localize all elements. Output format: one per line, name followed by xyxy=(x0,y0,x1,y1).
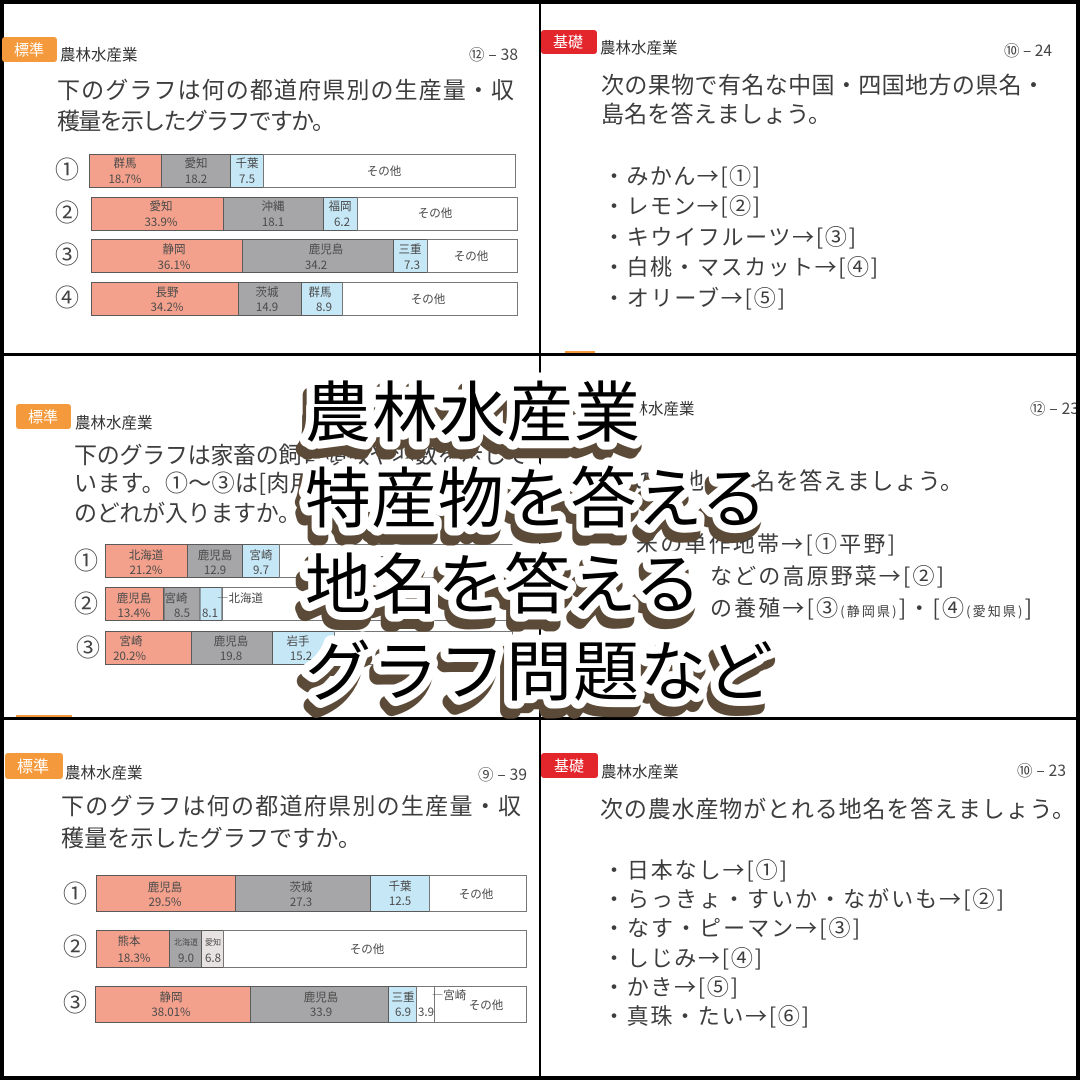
chart row 1: 21.2% xyxy=(130,562,163,578)
chart row 2: その他 xyxy=(350,941,385,957)
badge: standard level: 標準 xyxy=(28,406,58,427)
overlay title xyxy=(305,360,773,715)
chart row 2: 鹿児島 xyxy=(117,590,151,606)
badge: basic level xyxy=(541,753,598,778)
chart row 2: その他 xyxy=(418,205,453,221)
question text: 穫量を示したグラフですか。 xyxy=(61,819,361,853)
question text: 下のグラフは何の都道府県別の生産量・収 xyxy=(61,787,521,821)
chart row 1: ① xyxy=(63,874,87,909)
chart row 1: 千葉 xyxy=(388,878,412,894)
chart row 3: 34.2 xyxy=(305,257,327,273)
badge: basic level xyxy=(541,30,597,54)
chart row 3: ③ xyxy=(76,628,100,663)
badge: standard level: 標準 xyxy=(17,753,49,777)
chart row 1: 7.5 xyxy=(239,171,255,187)
question text: います。①〜③は[肉用牛・豚・採卵鶏] xyxy=(74,464,484,498)
chart row 1: 鹿児島 xyxy=(198,547,232,563)
question number: ⑩ – 24 xyxy=(1004,39,1052,61)
chart row 2: ② xyxy=(55,193,79,228)
chart row 3: 三重 xyxy=(398,241,422,257)
category label: 農林水産業 xyxy=(600,36,678,58)
chart row 3: —宮崎 xyxy=(432,987,467,1003)
question text: 穫量を示したグラフですか。 xyxy=(57,102,335,136)
chart row 2 xyxy=(63,927,526,968)
chart row 4: 14.9 xyxy=(256,299,278,315)
chart row 3: 鹿児島 xyxy=(304,989,338,1005)
question number: ⑩ – 23 xyxy=(1017,759,1066,781)
chart row 3 xyxy=(63,983,526,1022)
category label: 農林水産業 xyxy=(617,397,695,419)
chart row 3: 36.1% xyxy=(158,257,191,273)
chart row 2: 愛知 xyxy=(150,198,172,214)
answer list: ・キウイフルーツ→[③] xyxy=(603,220,856,252)
chart row 2: 6.2 xyxy=(334,214,350,230)
chart row 3: 15.2 xyxy=(290,648,312,664)
chart row 1: 12.9 xyxy=(204,562,226,578)
chart row 1: 茨城 xyxy=(290,879,313,895)
chart row 2 xyxy=(55,193,518,230)
chart row 1: 愛知 xyxy=(184,155,208,171)
chart row 3: 静岡 xyxy=(160,989,182,1005)
chart row 3: 33.9 xyxy=(310,1004,332,1020)
question text: 下のグラフは家畜の飼育頭数や羽数を示して xyxy=(74,436,528,470)
chart row 2: 9.0 xyxy=(178,950,194,966)
category label: 農林水産業 xyxy=(601,760,679,782)
answer list xyxy=(636,527,1032,623)
chart row 1: 千葉 xyxy=(236,155,259,171)
chart row 1 xyxy=(63,874,526,912)
chart row 3: 19.8 xyxy=(220,648,242,664)
question text: 次の果物で有名な中国・四国地方の県名・ xyxy=(601,66,1045,100)
panel: graph question 12-38 xyxy=(2,4,539,353)
answer list: ・みかん→[①] xyxy=(603,159,760,191)
chart row 1 xyxy=(74,541,512,578)
panel: livestock graph question xyxy=(4,356,539,717)
panel: regional production question 12-23 xyxy=(541,356,1079,717)
chart row 3: 6.9 xyxy=(395,1004,411,1020)
chart row 1: 29.5% xyxy=(149,894,182,910)
chart row 1: 鹿児島 xyxy=(148,879,182,895)
category label: 農林水産業 xyxy=(60,43,138,65)
chart row 2: 北海道 xyxy=(174,937,198,948)
chart row 2: ② xyxy=(74,584,98,619)
chart row 3: 鹿児島 xyxy=(214,633,248,649)
answer list: の養殖→[③(静岡県)]・[④(愛知県)] xyxy=(710,591,1032,623)
chart row 2: 愛知 xyxy=(205,937,221,948)
chart row 3 xyxy=(76,628,512,664)
question number: ⑫ – 38 xyxy=(469,43,518,65)
overlay title: グラフ問題など xyxy=(305,619,773,715)
chart row 3: 鹿児島 xyxy=(309,241,343,257)
chart row 2: 33.9% xyxy=(145,214,178,230)
chart row 1: 27.3 xyxy=(290,894,312,910)
category label: 農林水産業 xyxy=(65,761,143,783)
chart row 4: 茨城 xyxy=(256,284,279,300)
chart row 2: 沖縄 xyxy=(262,198,285,214)
chart row 3: その他 xyxy=(469,997,504,1013)
badge: standard level xyxy=(5,753,63,779)
question text: 島名を答えましょう。 xyxy=(601,95,831,129)
answer list: ・日本なし→[①] xyxy=(603,853,787,885)
chart row 4: 群馬 xyxy=(308,284,332,300)
answer list: 米の単作地帯→[①平野] xyxy=(636,527,895,559)
chart row 3: ③ xyxy=(55,235,79,270)
chart row 1: 18.2 xyxy=(185,171,207,187)
chart row 2: 熊本 xyxy=(118,933,141,949)
chart row 1: ① xyxy=(55,150,79,185)
answer list: ・白桃・マスカット→[④] xyxy=(603,250,878,282)
question text xyxy=(57,71,514,136)
chart row 1: 12.5 xyxy=(389,893,411,909)
answer list: ・らっきょ・すいか・ながいも→[②] xyxy=(603,882,1004,914)
answer list: などの高原野菜→[②] xyxy=(710,559,944,591)
answer list: ・しじみ→[④] xyxy=(603,941,762,973)
category label: 農林水産業 xyxy=(75,411,153,433)
panel: production place question 10-23 xyxy=(541,720,1076,1076)
answer list: ・真珠・たい→[⑥] xyxy=(603,999,809,1031)
chart row 3: 静岡 xyxy=(162,241,186,257)
chart row 3: 3.9 xyxy=(418,1004,434,1020)
chart row 4: 34.2% xyxy=(151,299,184,315)
answer list xyxy=(603,159,878,313)
question text: 次の産地の地名を答えましょう。 xyxy=(610,462,963,496)
chart row 3: 38.01% xyxy=(151,1004,191,1020)
chart row 1: 18.7% xyxy=(109,171,142,187)
answer list: ・なす・ピーマン→[③] xyxy=(603,911,860,943)
chart row 3: その他 xyxy=(454,248,489,264)
answer list: ・レモン→[②] xyxy=(603,189,760,221)
chart row 4: その他 xyxy=(411,291,446,307)
chart row 2: 18.1 xyxy=(262,214,284,230)
chart row 2: 福岡 xyxy=(328,198,352,214)
chart row 3: 7.3 xyxy=(404,257,420,273)
question number: ⑨ – 39 xyxy=(478,763,527,785)
question text: のどれが入りますか。 xyxy=(74,494,301,528)
badge: basic level: 基礎 xyxy=(554,755,584,776)
question number: ⑫ – 23 xyxy=(1030,397,1079,419)
chart row 2: その他 xyxy=(363,597,398,613)
chart row 2: 13.4% xyxy=(118,605,151,621)
chart row 1: 群馬 xyxy=(114,155,136,171)
chart row 3 xyxy=(55,235,518,273)
chart row 2 xyxy=(74,584,512,621)
chart row 1: 宮崎 xyxy=(250,547,273,563)
next badge peek xyxy=(16,715,72,717)
question text: 下のグラフは何の都道府県別の生産量・収 xyxy=(57,71,514,105)
chart row 3: 岩手 xyxy=(286,633,310,649)
chart row 3: ③ xyxy=(63,983,87,1018)
answer list: ・かき→[⑤] xyxy=(603,970,738,1002)
chart row 2: 18.3% xyxy=(118,950,151,966)
chart row 3: 三重 xyxy=(392,989,414,1005)
answer list: ・オリーブ→[⑤] xyxy=(603,281,785,313)
question text xyxy=(61,787,521,853)
question text xyxy=(74,436,528,528)
panel: graph question 9-39 xyxy=(4,720,539,1076)
overlay title: 地名を答える xyxy=(305,532,701,628)
chart row 2: 8.5 xyxy=(174,605,190,621)
chart row 1: ① xyxy=(74,541,98,576)
chart row 1: 9.7 xyxy=(253,562,269,578)
answer list xyxy=(603,853,1004,1031)
chart row 1: その他 xyxy=(459,886,494,902)
chart row 4: 長野 xyxy=(156,284,179,300)
chart row 4: ④ xyxy=(55,278,79,313)
overlay title: 特産物を答える xyxy=(305,446,767,542)
badge: standard level: 標準 xyxy=(14,39,44,60)
badge: standard level xyxy=(2,37,57,62)
chart row 2: ② xyxy=(63,927,87,962)
overlay title: 農林水産業 xyxy=(305,360,640,456)
chart row 3: 20.2% xyxy=(113,648,146,664)
chart row 1: 北海道 xyxy=(129,547,164,563)
question text: 次の農水産物がとれる地名を答えましょう。 xyxy=(600,790,1075,824)
question text xyxy=(601,66,1045,129)
chart row 2: 宮崎 xyxy=(164,590,188,606)
panel: fruit question 10-24 xyxy=(541,4,1076,353)
chart row 1: その他 xyxy=(367,163,402,179)
chart row 4 xyxy=(55,278,518,316)
chart row 2: 6.8 xyxy=(205,950,221,966)
chart row 1 xyxy=(55,150,516,188)
badge: standard level xyxy=(16,404,71,429)
chart row 1: その他 xyxy=(378,553,413,569)
chart row 2: 8.1 xyxy=(202,605,218,621)
next badge peek xyxy=(565,351,595,353)
chart row 4: 8.9 xyxy=(316,299,332,315)
badge: basic level: 基礎 xyxy=(553,31,583,52)
chart row 3: 宮崎 xyxy=(120,633,143,649)
chart row 2: —北海道 xyxy=(217,590,263,606)
